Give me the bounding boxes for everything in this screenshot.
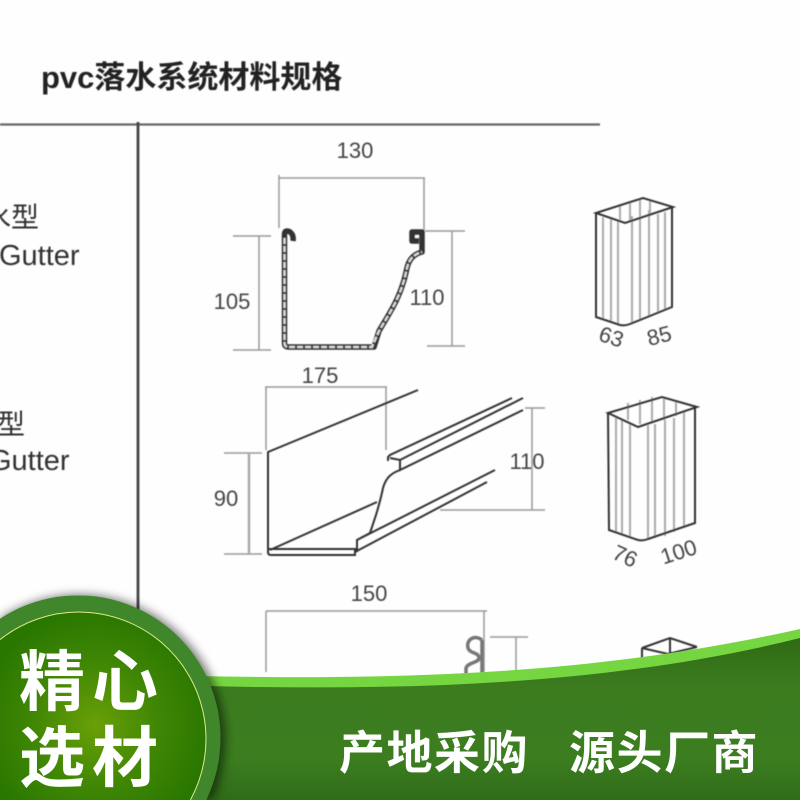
diagram: third downpipe (partly hidden) (642, 638, 697, 665)
row label: first gutter type: Gutter (0, 240, 80, 272)
diagram: 175 gutter perspective: 90 (214, 486, 238, 511)
diagram: 63×85 downpipe (596, 198, 674, 353)
row label: second gutter type (0, 409, 70, 477)
diagram: 130 gutter profile: 105 (214, 289, 250, 314)
footer band (0, 629, 800, 800)
diagram: 130 gutter profile (214, 138, 465, 350)
diagram: 76×100 downpipe (608, 397, 700, 573)
diagram: 76×100 downpipe: 76 (609, 540, 641, 573)
badge text (19, 645, 165, 795)
diagram: 130 gutter profile: 130 (337, 138, 373, 163)
diagram: 63×85 downpipe: 85 (644, 321, 674, 351)
diagram: 63×85 downpipe: 63 (596, 321, 627, 353)
diagram: 150 gutter profile (partly hidden): 150 (351, 581, 387, 606)
diagram: 130 gutter profile: 110 (409, 285, 445, 310)
diagram: 175 gutter perspective: 175 (302, 363, 338, 388)
row label: first gutter type (0, 202, 80, 272)
title: pvc落水系统材料规格 (41, 60, 342, 95)
badge text: 精心 (19, 645, 165, 719)
diagram: 175 gutter perspective: 110 (509, 449, 545, 474)
footer slogan: 源头厂商 (569, 727, 759, 779)
footer slogan (339, 727, 759, 779)
badge circle (0, 595, 225, 800)
diagram: 150 gutter profile (partly hidden) (266, 581, 528, 674)
table frame lines (0, 122, 600, 620)
diagram: 76×100 downpipe: 100 (657, 534, 700, 569)
diagram: 175 gutter perspective (214, 363, 545, 555)
badge text: 选材 (19, 721, 165, 795)
footer slogan: 产地采购 (339, 727, 529, 779)
